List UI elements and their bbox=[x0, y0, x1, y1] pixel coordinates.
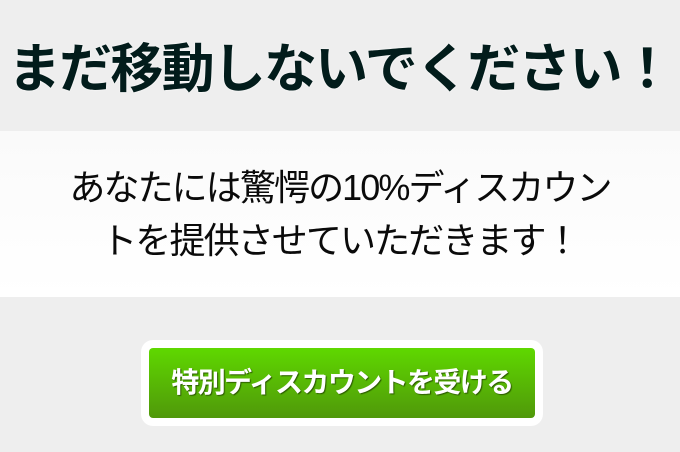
text line 1: あなたには驚愕の10%ディスカウン bbox=[69, 167, 611, 208]
button label bbox=[149, 348, 535, 418]
title: まだ移動しないでください！ bbox=[8, 40, 672, 99]
text line 2: トを提供させていただきます！ bbox=[101, 220, 579, 261]
button: special discount bbox=[141, 340, 543, 426]
button label: 特別ディスカウントを受ける bbox=[171, 367, 513, 398]
panel: discount message bbox=[0, 131, 680, 297]
